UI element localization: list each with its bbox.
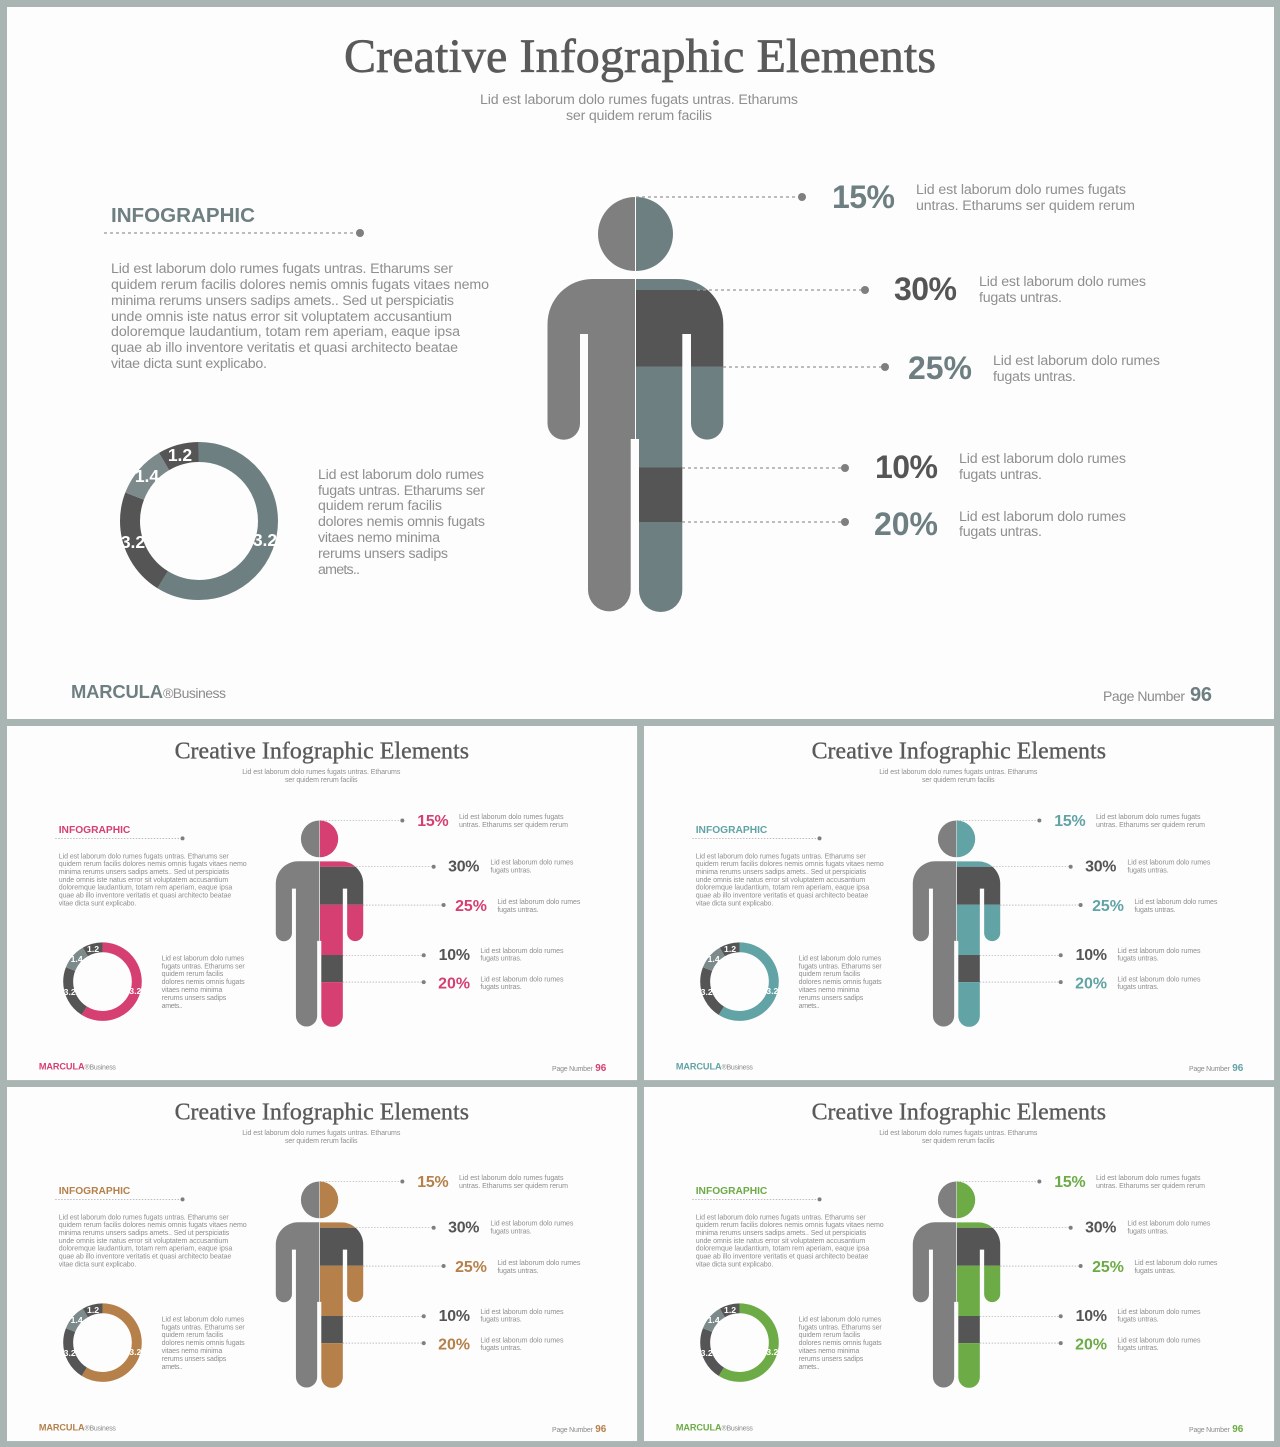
callout: 10% xyxy=(343,947,564,964)
subtitle: ser quidem rerum facilis xyxy=(922,1138,995,1145)
subtitle xyxy=(242,769,401,784)
text block: intro paragraph: doloremque laudantium, totam rem aperiam, eaque ipsa xyxy=(59,885,232,892)
callout: 10%: Lid est laborum dolo rumes xyxy=(1117,948,1201,955)
callout: 10%: Lid est laborum dolo rumes xyxy=(480,948,564,955)
heading: infographic xyxy=(104,204,364,237)
callout: 10%: Lid est laborum dolo rumes xyxy=(1117,1309,1201,1316)
callout: 30% xyxy=(350,859,574,876)
callout: 20%: 20% xyxy=(438,976,470,993)
text block: intro paragraph: vitae dicta sunt explicabo. xyxy=(696,901,773,908)
callout: 30%: fugats untras. xyxy=(1127,868,1169,875)
brand footer: MARCULA xyxy=(39,1062,85,1072)
brand footer: ®Business xyxy=(163,685,226,701)
text block: donut description: dolores nemis omnis fugats xyxy=(162,979,245,986)
callout: 25%: Lid est laborum dolo rumes xyxy=(1134,1260,1218,1267)
subtitle: Lid est laborum dolo rumes fugats untras. Etharums xyxy=(879,1130,1038,1137)
donut chart xyxy=(701,1305,779,1377)
panel: main slide xyxy=(7,7,1274,719)
human figure chart xyxy=(913,1181,1001,1388)
donut chart: 3.2 xyxy=(766,986,779,996)
callout: 25%: 25% xyxy=(1092,898,1124,915)
text block: donut description: vitaes nemo minima xyxy=(162,1348,222,1355)
text block: donut description: fugats untras. Etharums ser xyxy=(799,1325,882,1332)
callout: 15%: 15% xyxy=(1054,813,1086,830)
page number: 96 xyxy=(595,1063,607,1074)
callout: 10% xyxy=(682,449,1126,485)
callout: 10%: fugats untras. xyxy=(480,1317,522,1324)
donut chart xyxy=(64,944,142,1016)
brand footer: ®Business xyxy=(722,1064,753,1072)
text block: donut description: rerums unsers sadips xyxy=(162,1356,227,1363)
callout: 15%: untras. Etharums ser quidem rerum xyxy=(459,1183,568,1190)
text block: donut description: amets.. xyxy=(799,1003,820,1010)
callout: 10% xyxy=(980,947,1201,964)
donut chart: 3.2 xyxy=(766,1347,779,1357)
callout: 30%: 30% xyxy=(448,1220,479,1237)
text block: intro paragraph: Lid est laborum dolo rumes fugats untras. Etharums ser xyxy=(111,261,453,277)
brand footer: ®Business xyxy=(722,1425,753,1433)
text block: intro paragraph: vitae dicta sunt explicabo. xyxy=(59,1262,136,1269)
page number: 96 xyxy=(1190,684,1212,706)
donut chart: 3.2 xyxy=(253,530,277,550)
heading: infographic: INFOGRAPHIC xyxy=(59,1186,131,1197)
text block: intro paragraph: minima rerums unsers sadips amets.. Sed ut perspiciatis xyxy=(696,1230,867,1237)
title: Creative Infographic Elements xyxy=(812,738,1106,764)
text block: intro paragraph: quidem rerum facilis dolores nemis omnis fugats vitaes nemo xyxy=(696,1222,884,1229)
callout: 25% xyxy=(1000,1259,1218,1276)
text block: donut description: vitaes nemo minima xyxy=(799,1348,859,1355)
brand footer: MARCULA xyxy=(676,1423,722,1433)
callout: 30%: 30% xyxy=(1085,1220,1116,1237)
callout: 20% xyxy=(980,976,1201,993)
text block: intro paragraph: minima rerums unsers sadips amets.. Sed ut perspiciatis xyxy=(111,293,454,309)
text block: intro paragraph: quae ab illo inventore veritatis et quasi architecto beatae xyxy=(59,893,231,900)
text block: donut description: Lid est laborum dolo rumes xyxy=(799,1317,882,1324)
callout: 15%: untras. Etharums ser quidem rerum xyxy=(1096,822,1205,829)
page number: Page Number xyxy=(1189,1427,1230,1434)
callout: 15%: 15% xyxy=(417,1174,449,1191)
callout: 15% xyxy=(957,813,1205,830)
text block: donut description: quidem rerum facilis xyxy=(162,1332,224,1339)
brand footer: MARCULA xyxy=(39,1423,85,1433)
callout: 20%: fugats untras. xyxy=(959,524,1042,540)
callout: 20% xyxy=(343,1337,564,1354)
subtitle xyxy=(879,769,1038,784)
text block: intro paragraph: unde omnis iste natus error sit voluptatem accusantium xyxy=(696,1238,865,1245)
heading: infographic xyxy=(692,1186,822,1201)
callout: 20%: fugats untras. xyxy=(1117,984,1159,991)
text block: donut description: fugats untras. Etharums ser xyxy=(318,483,485,499)
callout: 20%: Lid est laborum dolo rumes xyxy=(480,1338,564,1345)
text block: donut description: rerums unsers sadips xyxy=(799,1356,864,1363)
text block: donut description: rerums unsers sadips xyxy=(162,995,227,1002)
text block: intro paragraph: quidem rerum facilis dolores nemis omnis fugats vitaes nemo xyxy=(696,861,884,868)
subtitle xyxy=(242,1130,401,1145)
callout: 15% xyxy=(957,1174,1205,1191)
subtitle: Lid est laborum dolo rumes fugats untras. Etharums xyxy=(480,92,798,108)
text block: intro paragraph: Lid est laborum dolo rumes fugats untras. Etharums ser xyxy=(59,853,229,860)
brand footer xyxy=(39,1062,116,1072)
callout: 25%: fugats untras. xyxy=(1134,1268,1176,1275)
text block: intro paragraph: vitae dicta sunt explicabo. xyxy=(111,356,267,372)
text block: intro paragraph: quidem rerum facilis dolores nemis omnis fugats vitaes nemo xyxy=(111,277,489,293)
callout: 25%: fugats untras. xyxy=(993,369,1076,385)
donut chart: 1.4 xyxy=(708,1315,720,1325)
callout: 30%: Lid est laborum dolo rumes xyxy=(979,274,1146,290)
callout: 15%: Lid est laborum dolo rumes fugats xyxy=(1096,814,1201,821)
subtitle xyxy=(879,1130,1038,1145)
text block: intro paragraph: unde omnis iste natus error sit voluptatem accusantium xyxy=(111,309,452,325)
callout: 10%: 10% xyxy=(439,1308,470,1325)
text block: intro paragraph xyxy=(696,1214,884,1269)
page number: Page Number xyxy=(552,1066,593,1073)
heading: infographic: INFOGRAPHIC xyxy=(696,825,768,836)
callout: 30%: Lid est laborum dolo rumes xyxy=(490,1221,574,1228)
callout: 30%: fugats untras. xyxy=(979,290,1062,306)
heading: infographic: INFOGRAPHIC xyxy=(696,1186,768,1197)
text block: donut description: dolores nemis omnis fugats xyxy=(799,979,882,986)
text block: donut description: quidem rerum facilis xyxy=(799,971,861,978)
donut chart: 1.2 xyxy=(87,1305,99,1315)
callout: 20%: 20% xyxy=(1075,976,1107,993)
callout: 10%: 10% xyxy=(1076,1308,1107,1325)
donut chart: 3.2 xyxy=(129,986,142,996)
callout: 30%: Lid est laborum dolo rumes xyxy=(490,860,574,867)
callout: 15% xyxy=(320,1174,568,1191)
callout: 30% xyxy=(987,859,1211,876)
donut chart: 3.2 xyxy=(64,987,76,997)
text block: intro paragraph: Lid est laborum dolo rumes fugats untras. Etharums ser xyxy=(696,1214,866,1221)
brand footer: MARCULA xyxy=(71,681,163,702)
text block: intro paragraph: quae ab illo inventore veritatis et quasi architecto beatae xyxy=(696,893,868,900)
brand footer: MARCULA xyxy=(676,1062,722,1072)
text block: donut description: Lid est laborum dolo rumes xyxy=(799,956,882,963)
text block: donut description: Lid est laborum dolo rumes xyxy=(162,1317,245,1324)
callout: 25%: Lid est laborum dolo rumes xyxy=(497,1260,581,1267)
text block: donut description: dolores nemis omnis fugats xyxy=(318,514,485,530)
callout: 30%: fugats untras. xyxy=(490,868,532,875)
text block: donut description: amets.. xyxy=(318,562,360,578)
callout: 20%: fugats untras. xyxy=(1117,1345,1159,1352)
heading: infographic xyxy=(692,825,822,840)
text block: intro paragraph: doloremque laudantium, totam rem aperiam, eaque ipsa xyxy=(696,885,869,892)
text block: donut description: dolores nemis omnis fugats xyxy=(799,1340,882,1347)
text block: donut description xyxy=(799,956,882,1010)
page number: Page Number xyxy=(1189,1066,1230,1073)
callout: 25%: Lid est laborum dolo rumes xyxy=(497,899,581,906)
donut chart: 1.2 xyxy=(724,1305,736,1315)
callout: 30% xyxy=(987,1220,1211,1237)
text block: donut description: dolores nemis omnis fugats xyxy=(162,1340,245,1347)
text block: donut description: amets.. xyxy=(799,1364,820,1371)
text block: intro paragraph xyxy=(59,853,247,908)
callout: 25% xyxy=(1000,898,1218,915)
callout: 20% xyxy=(682,506,1126,542)
callout: 20%: Lid est laborum dolo rumes xyxy=(1117,1338,1201,1345)
callout: 10%: fugats untras. xyxy=(1117,956,1159,963)
callout: 25%: 25% xyxy=(908,350,972,386)
brand footer: ®Business xyxy=(85,1064,116,1072)
callout: 30%: fugats untras. xyxy=(1127,1229,1169,1236)
text block: intro paragraph: doloremque laudantium, totam rem aperiam, eaque ipsa xyxy=(59,1246,232,1253)
text block: intro paragraph: minima rerums unsers sadips amets.. Sed ut perspiciatis xyxy=(696,869,867,876)
callout: 15%: Lid est laborum dolo rumes fugats xyxy=(916,182,1126,198)
callout: 30%: 30% xyxy=(1085,859,1116,876)
callout: 15%: Lid est laborum dolo rumes fugats xyxy=(1096,1175,1201,1182)
callout: 15%: untras. Etharums ser quidem rerum xyxy=(459,822,568,829)
callout: 30%: 30% xyxy=(894,271,957,307)
text block: donut description: amets.. xyxy=(162,1003,183,1010)
text block: intro paragraph xyxy=(59,1214,247,1269)
page number: Page Number xyxy=(552,1427,593,1434)
callout: 25%: 25% xyxy=(1092,1259,1124,1276)
text block: intro paragraph xyxy=(111,261,489,372)
text block: donut description: vitaes nemo minima xyxy=(318,530,440,546)
text block: intro paragraph: Lid est laborum dolo rumes fugats untras. Etharums ser xyxy=(696,853,866,860)
brand footer xyxy=(39,1423,116,1433)
callout: 10%: 10% xyxy=(1076,947,1107,964)
callout: 25% xyxy=(363,898,581,915)
heading: infographic xyxy=(55,1186,185,1201)
donut chart: 1.2 xyxy=(724,944,736,954)
subtitle: Lid est laborum dolo rumes fugats untras. Etharums xyxy=(879,769,1038,776)
donut chart: 3.2 xyxy=(121,532,145,552)
callout: 25%: Lid est laborum dolo rumes xyxy=(993,353,1160,369)
callout: 30%: Lid est laborum dolo rumes xyxy=(1127,860,1211,867)
page number xyxy=(1189,1063,1244,1074)
text block: intro paragraph: quae ab illo inventore veritatis et quasi architecto beatae xyxy=(59,1254,231,1261)
title: Creative Infographic Elements xyxy=(344,30,936,83)
human figure chart xyxy=(276,1181,364,1388)
heading: infographic: INFOGRAPHIC xyxy=(111,204,255,227)
panel: green slide xyxy=(644,1087,1274,1441)
donut chart: 3.2 xyxy=(64,1348,76,1358)
callout: 10%: 10% xyxy=(875,449,938,485)
text block: donut description xyxy=(799,1317,882,1371)
text block: intro paragraph: unde omnis iste natus error sit voluptatem accusantium xyxy=(696,877,865,884)
page number xyxy=(1189,1424,1244,1435)
text block: donut description xyxy=(318,467,485,578)
donut chart: 1.4 xyxy=(135,466,159,486)
text block: donut description: quidem rerum facilis xyxy=(799,1332,861,1339)
title: Creative Infographic Elements xyxy=(175,738,469,764)
callout: 15%: Lid est laborum dolo rumes fugats xyxy=(459,1175,564,1182)
human figure chart xyxy=(913,820,1001,1027)
callout: 15%: untras. Etharums ser quidem rerum xyxy=(916,198,1135,214)
page number: 96 xyxy=(595,1424,607,1435)
text block: intro paragraph xyxy=(696,853,884,908)
brand footer xyxy=(676,1062,753,1072)
text block: intro paragraph: quidem rerum facilis dolores nemis omnis fugats vitaes nemo xyxy=(59,861,247,868)
page number xyxy=(552,1063,607,1074)
callout: 20%: Lid est laborum dolo rumes xyxy=(1117,977,1201,984)
callout: 15%: 15% xyxy=(832,179,895,215)
callout: 10%: fugats untras. xyxy=(959,467,1042,483)
text block: donut description: Lid est laborum dolo rumes xyxy=(162,956,245,963)
brand footer: ®Business xyxy=(85,1425,116,1433)
callout: 25%: fugats untras. xyxy=(497,907,539,914)
subtitle: Lid est laborum dolo rumes fugats untras. Etharums xyxy=(242,769,401,776)
donut chart: 3.2 xyxy=(701,1348,713,1358)
text block: intro paragraph: minima rerums unsers sadips amets.. Sed ut perspiciatis xyxy=(59,1230,230,1237)
text block: intro paragraph: quae ab illo inventore veritatis et quasi architecto beatae xyxy=(696,1254,868,1261)
subtitle: Lid est laborum dolo rumes fugats untras. Etharums xyxy=(242,1130,401,1137)
donut chart: 1.2 xyxy=(168,445,192,465)
callout: 25%: 25% xyxy=(455,898,487,915)
callout: 15%: Lid est laborum dolo rumes fugats xyxy=(459,814,564,821)
text block: intro paragraph: unde omnis iste natus error sit voluptatem accusantium xyxy=(59,877,228,884)
callout: 15% xyxy=(320,813,568,830)
page number: 96 xyxy=(1232,1424,1244,1435)
callout: 20%: 20% xyxy=(1075,1337,1107,1354)
callout: 10%: fugats untras. xyxy=(1117,1317,1159,1324)
callout: 15% xyxy=(636,179,1135,215)
donut chart xyxy=(121,445,277,590)
heading: infographic xyxy=(55,825,185,840)
panel: teal slide xyxy=(644,726,1274,1080)
callout: 30% xyxy=(350,1220,574,1237)
subtitle: ser quidem rerum facilis xyxy=(566,108,712,124)
callout: 25% xyxy=(363,1259,581,1276)
text block: donut description xyxy=(162,956,245,1010)
callout: 30% xyxy=(697,271,1146,307)
panel: pink slide xyxy=(7,726,637,1080)
text block: donut description: vitaes nemo minima xyxy=(162,987,222,994)
callout: 10%: Lid est laborum dolo rumes xyxy=(959,451,1126,467)
page number xyxy=(1103,684,1212,706)
callout: 25%: Lid est laborum dolo rumes xyxy=(1134,899,1218,906)
subtitle: ser quidem rerum facilis xyxy=(285,1138,358,1145)
text block: donut description: fugats untras. Etharums ser xyxy=(162,1325,245,1332)
text block: donut description xyxy=(162,1317,245,1371)
callout: 10%: 10% xyxy=(439,947,470,964)
title: Creative Infographic Elements xyxy=(175,1099,469,1125)
donut chart: 1.4 xyxy=(71,1315,83,1325)
text block: intro paragraph: quae ab illo inventore veritatis et quasi architecto beatae xyxy=(111,340,458,356)
donut chart xyxy=(701,944,779,1016)
subtitle xyxy=(480,92,798,124)
text block: intro paragraph: minima rerums unsers sadips amets.. Sed ut perspiciatis xyxy=(59,869,230,876)
text block: donut description: quidem rerum facilis xyxy=(162,971,224,978)
text block: donut description: amets.. xyxy=(162,1364,183,1371)
callout: 15%: 15% xyxy=(417,813,449,830)
donut chart: 3.2 xyxy=(701,987,713,997)
text block: intro paragraph: vitae dicta sunt explicabo. xyxy=(59,901,136,908)
text block: donut description: Lid est laborum dolo rumes xyxy=(318,467,484,483)
page number: 96 xyxy=(1232,1063,1244,1074)
callout: 20% xyxy=(980,1337,1201,1354)
text block: donut description: quidem rerum facilis xyxy=(318,498,442,514)
callout: 10% xyxy=(980,1308,1201,1325)
callout: 25%: fugats untras. xyxy=(1134,907,1176,914)
callout: 30%: Lid est laborum dolo rumes xyxy=(1127,1221,1211,1228)
panel: brown slide xyxy=(7,1087,637,1441)
text block: intro paragraph: doloremque laudantium, totam rem aperiam, eaque ipsa xyxy=(111,324,460,340)
callout: 20%: Lid est laborum dolo rumes xyxy=(959,509,1126,525)
callout: 15%: 15% xyxy=(1054,1174,1086,1191)
callout: 20%: fugats untras. xyxy=(480,984,522,991)
callout: 25%: fugats untras. xyxy=(497,1268,539,1275)
brand footer xyxy=(71,681,226,702)
human figure chart xyxy=(548,197,724,612)
donut chart xyxy=(64,1305,142,1377)
callout: 30%: fugats untras. xyxy=(490,1229,532,1236)
callout: 20% xyxy=(343,976,564,993)
text block: intro paragraph: quidem rerum facilis dolores nemis omnis fugats vitaes nemo xyxy=(59,1222,247,1229)
text block: donut description: vitaes nemo minima xyxy=(799,987,859,994)
callout: 20%: fugats untras. xyxy=(480,1345,522,1352)
page number: Page Number xyxy=(1103,688,1185,704)
text block: intro paragraph: unde omnis iste natus error sit voluptatem accusantium xyxy=(59,1238,228,1245)
text block: donut description: fugats untras. Etharums ser xyxy=(799,964,882,971)
human figure chart xyxy=(276,820,364,1027)
callout: 10% xyxy=(343,1308,564,1325)
heading: infographic: INFOGRAPHIC xyxy=(59,825,131,836)
callout: 15%: untras. Etharums ser quidem rerum xyxy=(1096,1183,1205,1190)
brand footer xyxy=(676,1423,753,1433)
donut chart: 3.2 xyxy=(129,1347,142,1357)
donut chart: 1.2 xyxy=(87,944,99,954)
text block: intro paragraph: vitae dicta sunt explicabo. xyxy=(696,1262,773,1269)
page number xyxy=(552,1424,607,1435)
text block: donut description: rerums unsers sadips xyxy=(318,546,448,562)
callout: 20%: 20% xyxy=(438,1337,470,1354)
subtitle: ser quidem rerum facilis xyxy=(285,777,358,784)
callout: 10%: Lid est laborum dolo rumes xyxy=(480,1309,564,1316)
donut chart: 1.4 xyxy=(708,954,720,964)
text block: donut description: fugats untras. Etharums ser xyxy=(162,964,245,971)
text block: donut description: rerums unsers sadips xyxy=(799,995,864,1002)
callout: 25% xyxy=(723,350,1160,386)
title: Creative Infographic Elements xyxy=(812,1099,1106,1125)
callout: 20%: Lid est laborum dolo rumes xyxy=(480,977,564,984)
text block: intro paragraph: doloremque laudantium, totam rem aperiam, eaque ipsa xyxy=(696,1246,869,1253)
callout: 30%: 30% xyxy=(448,859,479,876)
donut chart: 1.4 xyxy=(71,954,83,964)
callout: 10%: fugats untras. xyxy=(480,956,522,963)
subtitle: ser quidem rerum facilis xyxy=(922,777,995,784)
callout: 25%: 25% xyxy=(455,1259,487,1276)
callout: 20%: 20% xyxy=(874,506,938,542)
text block: intro paragraph: Lid est laborum dolo rumes fugats untras. Etharums ser xyxy=(59,1214,229,1221)
